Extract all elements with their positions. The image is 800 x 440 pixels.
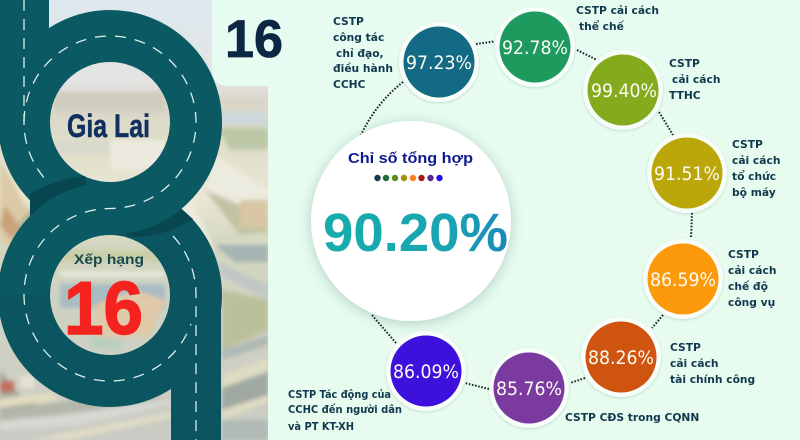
metric: cải cách TTHC 99.40%: [583, 50, 663, 130]
label: cải cách TTHC: TTHC: [669, 89, 701, 102]
label: tác động của CCHC: CSTP Tác động của: [288, 388, 391, 401]
label: cải cách thể chế: thể chế: [579, 20, 625, 33]
metric: cải cách thể chế 92.78%: [495, 7, 575, 87]
rank label: Xếp hạng: Xếp hạng: [74, 252, 144, 267]
label: cải cách chế độ công vụ: cải cách: [728, 264, 776, 277]
label: cải cách chế độ công vụ: chế độ: [728, 280, 768, 293]
metric: tác động đến người dân 86.09%: 86.09%: [393, 362, 459, 383]
label: công tác chỉ đạo: CSTP: [333, 15, 364, 28]
label: cải cách thể chế: CSTP cải cách: [576, 4, 659, 17]
metric: chỉ đạo, điều hành 97.23%: [399, 22, 479, 102]
metric: cải cách chế độ công vụ 86.59%: 86.59%: [650, 270, 716, 291]
metric: cải cách tài chính công 88.26%: [581, 317, 661, 397]
central panel: composite index: [311, 121, 511, 321]
metric: CĐS trong CQNN 85.76%: [489, 348, 569, 428]
road: dashed centre lines: [24, 0, 196, 440]
label: CĐS trong CQNN: CSTP CĐS trong CQNN: [565, 411, 699, 424]
label: tác động của CCHC: CCHC đến người dân: [288, 403, 402, 416]
label: công tác chỉ đạo: chỉ đạo,: [336, 47, 384, 60]
metric: cải cách chế độ công vụ 86.59%: [643, 239, 723, 319]
composite index value: 90.20%: [323, 203, 508, 263]
label: cải cách tài chính công: cải cách: [670, 357, 718, 370]
rank tab: [212, 0, 800, 86]
label: công tác chỉ đạo: điều hành: [333, 62, 393, 75]
road: S-curve crossing: [24, 122, 196, 295]
label: cải cách tổ chức bộ máy: cải cách: [732, 154, 780, 167]
label: cải cách tài chính công: tài chính công: [670, 373, 755, 386]
metric: cải cách tài chính công 88.26%: 88.26%: [588, 348, 654, 369]
label: cải cách tổ chức bộ máy: tổ chức: [732, 170, 776, 183]
place name: Gia Lai: Gia Lai: [67, 108, 150, 144]
metric: cải cách tổ chức bộ máy 91.51%: 91.51%: [654, 164, 720, 185]
metric: chỉ đạo, điều hành 97.23%: 97.23%: [406, 53, 472, 74]
colour dots row: [374, 175, 443, 181]
background photo: city and highway: [0, 0, 268, 440]
road: upper loop and left road: [0, 0, 196, 208]
road: lower loop and right road: [24, 209, 221, 440]
composite index heading: Chỉ số tổng hợp: [348, 151, 473, 167]
label: cải cách tổ chức bộ máy: CSTP: [732, 138, 763, 151]
label: cải cách chế độ công vụ: công vụ: [728, 296, 775, 309]
road: overlap shadows: [30, 176, 193, 237]
label: công tác chỉ đạo: CCHC: [333, 78, 366, 91]
metric: tác động đến người dân 86.09%: [386, 331, 466, 411]
dotted connectors: [361, 42, 692, 389]
label: cải cách chế độ công vụ: CSTP: [728, 248, 759, 261]
metric: cải cách tổ chức bộ máy 91.51%: [647, 133, 727, 213]
label: công tác chỉ đạo: công tác: [333, 31, 384, 44]
label: tác động của CCHC: và PT KT-XH: [288, 420, 354, 433]
label: cải cách tài chính công: CSTP: [670, 341, 701, 354]
metric: cải cách TTHC 99.40%: 99.40%: [591, 81, 657, 102]
road graphic: [0, 0, 221, 440]
label: cải cách TTHC: cải cách: [672, 73, 720, 86]
metric: CĐS trong CQNN 85.76%: 85.76%: [496, 379, 562, 400]
metric: cải cách thể chế 92.78%: 92.78%: [502, 38, 568, 59]
label: cải cách TTHC: CSTP: [669, 57, 700, 70]
rank tab number: 16: [225, 10, 283, 69]
label: cải cách tổ chức bộ máy: bộ máy: [732, 186, 776, 199]
rank number: 16: 16: [64, 266, 143, 350]
